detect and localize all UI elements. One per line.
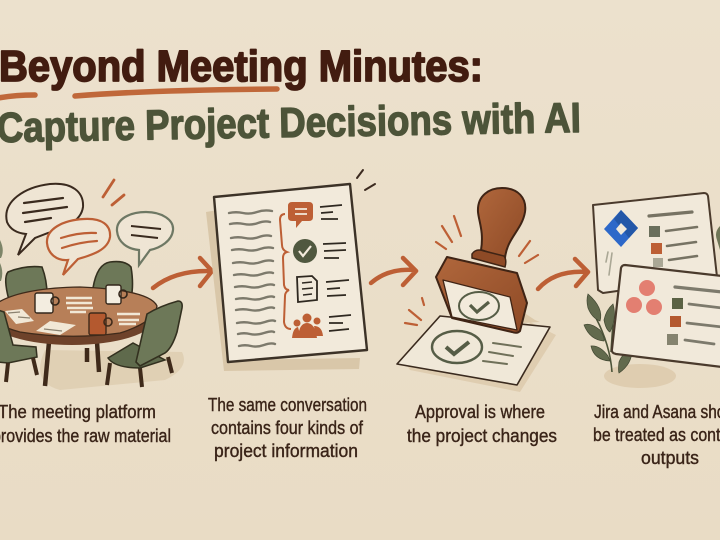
- papers on table: [5, 298, 140, 335]
- orange bracket: [280, 214, 291, 329]
- wavy transcript lines: [229, 210, 275, 347]
- title line 2: Capture Project Decisions with AI: [0, 94, 581, 151]
- speech bubble green: [117, 212, 173, 265]
- caption 2: The same conversation: [208, 394, 367, 415]
- paper check mark: [432, 331, 482, 363]
- caption 3: the project changes: [407, 425, 557, 446]
- speech bubble dark: [6, 184, 83, 255]
- stamp collar: [472, 250, 506, 267]
- left plant edge: [0, 240, 3, 281]
- stamp handle: [478, 188, 525, 258]
- mug orange: [89, 313, 112, 335]
- asana rows: [667, 287, 720, 345]
- caption 2: project information: [214, 440, 358, 461]
- panel: four kinds document: [206, 170, 375, 371]
- jira card: [593, 193, 717, 293]
- plant: [584, 294, 632, 373]
- document shadow: [206, 210, 360, 371]
- caption 1: The meeting platform: [0, 401, 156, 422]
- document sheet: [214, 184, 367, 362]
- stamp shadow: [490, 310, 540, 325]
- stamp check mark: [459, 292, 499, 320]
- floor shadow: [40, 350, 184, 390]
- emphasis dashes: [103, 180, 124, 205]
- icon: check circle: [293, 239, 317, 263]
- stamp block: [436, 257, 527, 333]
- right plant edge: [716, 226, 720, 250]
- title: [0, 42, 581, 151]
- mug white right: [106, 285, 127, 304]
- panel: meeting platform: [0, 180, 184, 390]
- panel: approval stamp: [397, 188, 556, 392]
- mug white left: [35, 293, 59, 313]
- stamp face: [443, 280, 517, 330]
- caption 3: Approval is where: [415, 401, 545, 422]
- impact dashes: [405, 216, 538, 325]
- arrow 3: [538, 259, 588, 289]
- caption 2: contains four kinds of: [211, 417, 364, 438]
- paper lines: [483, 343, 521, 364]
- asana logo: [626, 280, 662, 315]
- paper shadow: [405, 322, 556, 392]
- emphasis dashes: [357, 170, 375, 190]
- icon: people: [292, 314, 323, 338]
- asana card: [612, 265, 720, 367]
- title underline: [0, 89, 277, 98]
- list lines document: [326, 280, 349, 296]
- front chair right: [107, 301, 182, 387]
- panel: jira and asana: [584, 193, 720, 388]
- back chair right: [93, 262, 132, 298]
- icon: document: [297, 276, 317, 302]
- jira logo: [604, 210, 638, 247]
- ground shadow: [604, 364, 676, 388]
- paper sheet: [397, 316, 550, 385]
- table: [0, 287, 157, 345]
- list lines speech: [320, 205, 342, 219]
- arrow 1: [153, 258, 212, 288]
- list lines people: [329, 315, 351, 331]
- front chair left: [0, 310, 37, 382]
- icon: speech: [288, 202, 313, 228]
- arrow 2: [371, 258, 416, 285]
- table legs: [45, 342, 99, 386]
- caption 4: outputs: [641, 447, 699, 468]
- list lines check: [323, 243, 346, 258]
- jira rows: [649, 212, 697, 267]
- back chair left: [6, 267, 47, 302]
- speech bubble orange: [47, 219, 110, 275]
- title line 1: Beyond Meeting Minutes:: [0, 42, 483, 91]
